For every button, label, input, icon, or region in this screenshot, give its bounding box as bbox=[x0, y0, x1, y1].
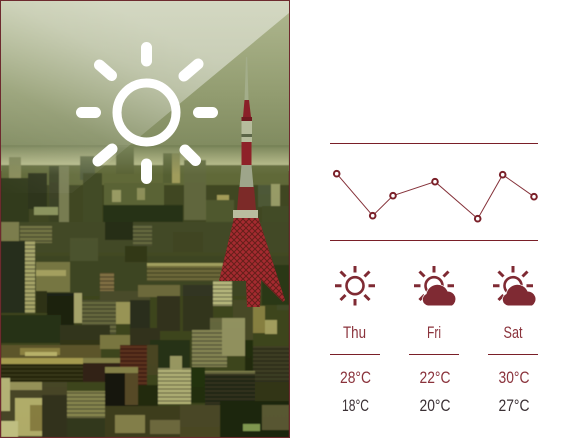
column: Saturday forecast: 30°C bbox=[498, 368, 530, 387]
column: Friday forecast bbox=[409, 323, 459, 415]
column: Saturday forecast: Sat bbox=[504, 323, 523, 342]
column: Thursday forecast: 18°C bbox=[342, 396, 369, 415]
mid-ground buildings bbox=[1, 222, 289, 345]
column: Saturday forecast bbox=[488, 323, 538, 415]
column: Thursday forecast: Thu bbox=[343, 323, 366, 342]
icon: Thu sun bbox=[335, 266, 375, 306]
panel: city photograph bbox=[0, 0, 290, 438]
glass shine overlay bbox=[1, 1, 289, 193]
column: Thursday forecast: 28°C bbox=[340, 368, 371, 387]
icon: large white sun bbox=[82, 48, 212, 178]
column: Friday forecast: 20°C bbox=[420, 396, 450, 415]
Tokyo Tower bbox=[219, 57, 285, 307]
icon: Fri sun with cloud bbox=[414, 266, 456, 306]
column: Thursday forecast bbox=[330, 323, 380, 415]
icon: Sat sun with cloud bbox=[493, 266, 536, 306]
column: Saturday forecast: 27°C bbox=[498, 396, 530, 415]
column: Friday forecast: Fri bbox=[427, 323, 441, 342]
column: Friday forecast: 22°C bbox=[420, 368, 450, 387]
distant skyline bbox=[1, 147, 289, 226]
horizon haze bbox=[1, 145, 289, 171]
line chart bbox=[330, 144, 538, 240]
foreground buildings bbox=[1, 318, 289, 438]
colour wash over the city bbox=[1, 147, 289, 438]
